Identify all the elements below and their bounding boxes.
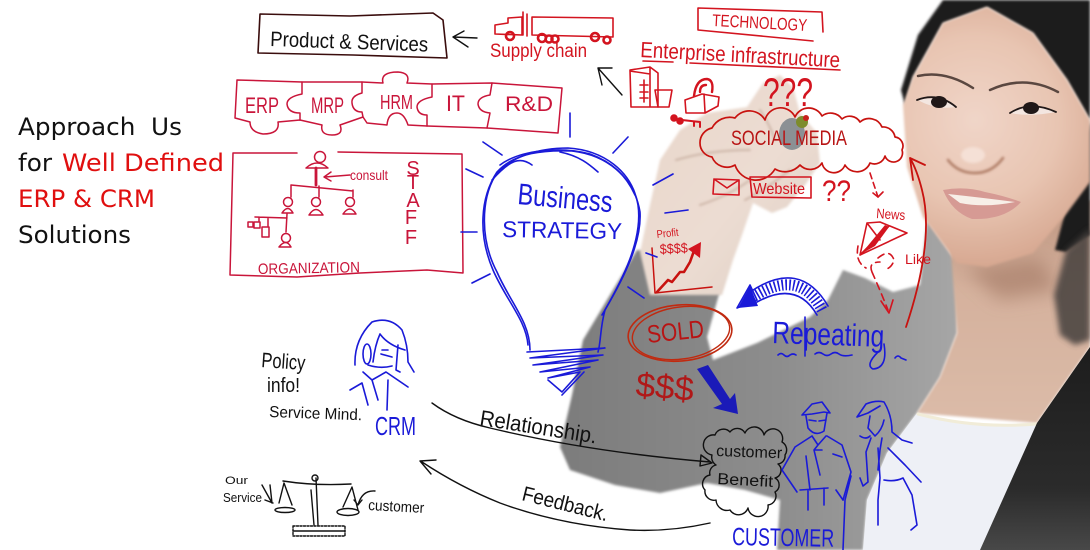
jacket	[980, 347, 1090, 550]
organization box	[230, 152, 463, 278]
staff vertical label: F	[405, 227, 417, 249]
puzzle: business functions: HRM	[380, 92, 413, 114]
consult arrow	[324, 172, 350, 181]
social media cloud	[700, 108, 903, 180]
teeth	[948, 194, 1015, 205]
scales of balance: Service	[223, 490, 262, 505]
left eye	[917, 96, 956, 108]
curved repeating arrow: Repeating	[772, 315, 885, 354]
blouse	[863, 413, 1037, 550]
crm notes	[261, 349, 362, 424]
product and services box: Product & Services	[270, 28, 429, 57]
hair	[901, 0, 1090, 252]
heading: approach us	[18, 113, 224, 249]
customer drawing: woman	[857, 401, 921, 530]
customer benefit cloud	[703, 427, 787, 517]
wisps of side hair	[1054, 228, 1090, 345]
heading: approach us: Well Defined	[62, 149, 224, 177]
crm notes: Policy	[261, 349, 307, 375]
customer benefit cloud: Benefit	[717, 471, 774, 491]
collar trim	[918, 414, 1036, 425]
sold badge	[626, 300, 734, 409]
customer drawing: man	[782, 402, 851, 550]
profit chart: Profit	[656, 227, 679, 241]
bulb base coil	[527, 348, 605, 395]
news paper plane and like: Like	[905, 251, 931, 267]
crm notes: info!	[267, 375, 300, 397]
technology box: TECHNOLOGY	[712, 11, 808, 35]
light bulb: business strategy	[461, 113, 688, 395]
supply chain truck	[490, 12, 613, 62]
photo: businesswoman writing on glass	[560, 0, 1090, 550]
supply chain truck: Supply chain	[490, 41, 587, 62]
crm agent drawing: CRM	[375, 411, 416, 441]
question marks over hand: ???	[763, 71, 813, 115]
staff vertical label: S	[406, 158, 420, 180]
face	[903, 7, 1090, 267]
heading: approach us: Solutions	[18, 221, 131, 249]
organization box: ORGANIZATION	[258, 259, 360, 278]
enterprise infrastructure heading: Enterprise infrastructure	[640, 37, 841, 72]
sold badge: $$$	[634, 366, 695, 409]
feedback arrow	[420, 460, 710, 530]
arrow: supply chain to products	[453, 31, 477, 47]
technology box	[698, 8, 823, 41]
customer benefit cloud: customer	[716, 443, 783, 462]
marker pen	[779, 115, 809, 150]
heading: approach us: Approach Us	[18, 113, 182, 141]
puzzle: business functions: MRP	[311, 93, 344, 118]
sleeve	[560, 220, 957, 550]
icons: server, bucket, lock and key	[630, 67, 719, 127]
heading: approach us: ERP & CRM	[18, 185, 155, 213]
sold badge: SOLD	[646, 315, 705, 349]
envelope and website box	[713, 175, 851, 208]
staff vertical label: F	[405, 207, 417, 229]
heading: approach us: for	[18, 149, 52, 177]
neck shadow under jaw	[965, 258, 1060, 300]
envelope and website box: Website	[753, 181, 805, 198]
bulb rays	[461, 113, 688, 298]
hand	[640, 75, 820, 295]
social media cloud: SOCIAL MEDIA	[731, 127, 847, 150]
staff vertical label: T	[407, 172, 419, 194]
curved repeating arrow	[737, 278, 906, 369]
profit chart: $$$$	[659, 240, 688, 257]
left eyebrow	[918, 74, 973, 88]
profit chart	[652, 227, 712, 293]
scales of balance: customer	[368, 497, 425, 517]
feedback curve arrow	[906, 158, 926, 327]
puzzle: business functions: IT	[446, 91, 465, 116]
neck and chest	[917, 200, 1090, 423]
news paper plane and like: News	[876, 205, 906, 223]
org chart	[248, 152, 356, 247]
scales of balance	[223, 475, 425, 536]
relationship arrow	[432, 403, 712, 466]
news paper plane and like	[857, 173, 931, 313]
staff vertical label: A	[406, 190, 420, 212]
finger shading	[676, 110, 790, 205]
crm notes: Service Mind.	[269, 404, 362, 424]
blue arrow: sold to customer	[697, 365, 738, 414]
nose	[948, 147, 1003, 173]
organization box: consult	[350, 167, 388, 183]
puzzle: business functions: ERP	[245, 93, 279, 118]
right eyebrow	[990, 82, 1058, 92]
envelope and website box: ??	[822, 175, 851, 208]
product and services box	[258, 13, 447, 58]
puzzle: business functions	[235, 72, 562, 135]
scales of balance: Our	[225, 475, 248, 487]
arrow: infrastructure to supply chain	[598, 68, 622, 95]
crm agent drawing	[350, 320, 416, 441]
relationship arrow: Relationship.	[478, 405, 599, 448]
lips	[943, 188, 1021, 219]
light bulb: business strategy: STRATEGY	[502, 216, 622, 244]
light bulb: business strategy: Business	[516, 178, 614, 219]
feedback arrow: Feedback.	[520, 483, 611, 526]
staff vertical label	[405, 158, 420, 249]
right eye	[1010, 102, 1056, 115]
puzzle: business functions: R&D	[505, 93, 553, 116]
